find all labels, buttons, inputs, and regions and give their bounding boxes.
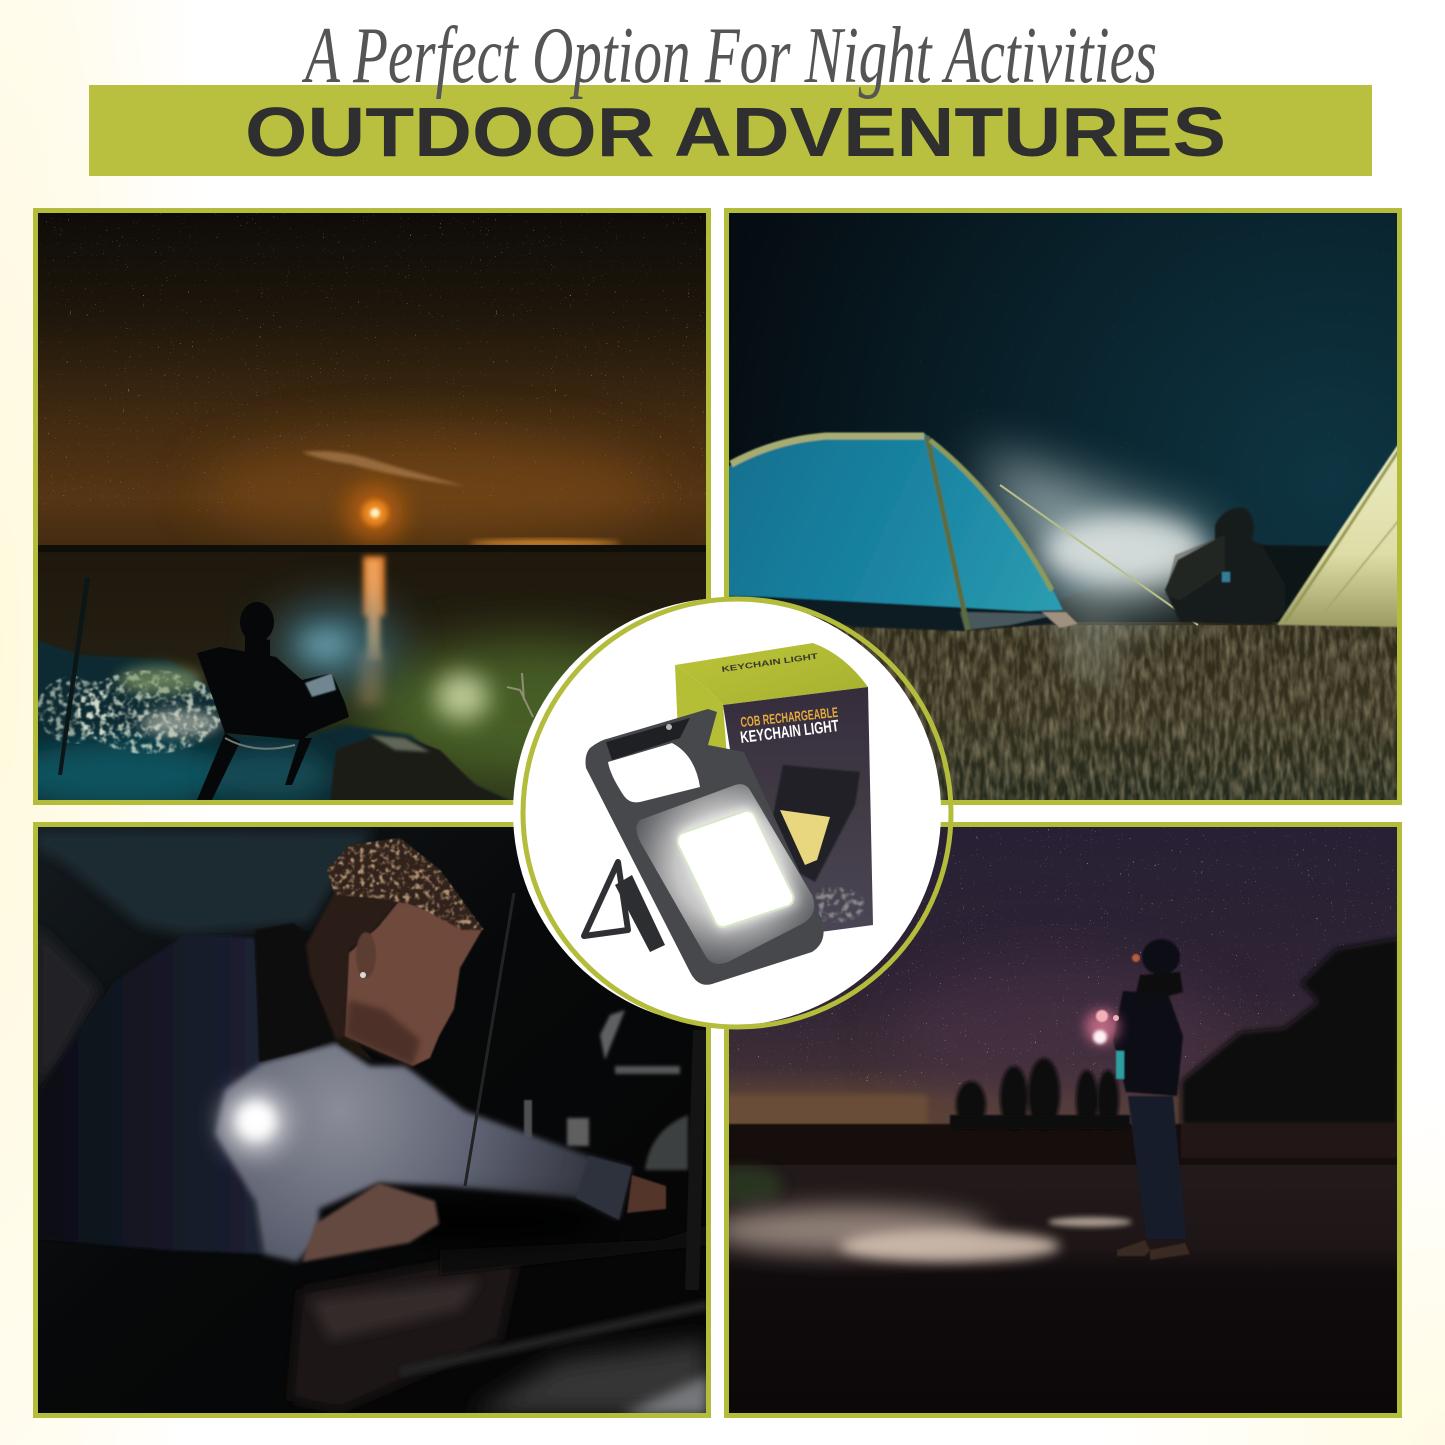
twigs xyxy=(507,673,533,717)
hand xyxy=(302,1183,439,1262)
box flap label: KEYCHAIN LIGHT xyxy=(721,652,818,674)
dark back of jacket xyxy=(36,934,263,1254)
cuff xyxy=(576,1156,632,1220)
ear xyxy=(356,932,376,978)
person standing xyxy=(1113,939,1190,1260)
center product circle xyxy=(513,598,951,1027)
light glow xyxy=(677,807,797,930)
box label white: KEYCHAIN LIGHT xyxy=(739,717,840,747)
road xyxy=(727,1165,1399,1415)
rocks foreground xyxy=(38,640,510,800)
sky xyxy=(727,211,1399,631)
collar xyxy=(255,923,336,1062)
white disc xyxy=(513,598,941,1026)
distant hills xyxy=(1060,544,1330,622)
moon xyxy=(347,485,403,541)
head lamp xyxy=(1132,954,1140,962)
person sitting xyxy=(1165,508,1285,625)
tree line and field xyxy=(727,938,1399,1169)
pink torch glow xyxy=(1085,1010,1119,1044)
script subtitle: A Perfect Option For Night Activities xyxy=(302,10,1157,100)
sky glow xyxy=(890,960,1230,1120)
horizon glow xyxy=(200,435,660,546)
main title: OUTDOOR ADVENTURES xyxy=(245,93,1226,171)
keychain art on box xyxy=(772,765,860,882)
far hand xyxy=(627,1175,666,1213)
rivet xyxy=(666,724,672,730)
sky xyxy=(36,211,708,549)
heading: banner and title text xyxy=(89,10,1372,176)
panel borders xyxy=(36,210,1400,1416)
seated person silhouette xyxy=(197,602,349,800)
starry print on box xyxy=(805,887,865,923)
pale yellow tent xyxy=(1277,443,1399,627)
chest lamp glow xyxy=(221,1088,289,1156)
thin cloud xyxy=(302,451,465,486)
curly hair xyxy=(327,838,484,930)
guy rope xyxy=(1000,485,1198,625)
water glow from torch xyxy=(275,609,700,780)
box label orange: COB RECHARGEABLE xyxy=(740,704,839,730)
title banner xyxy=(89,85,1372,176)
battery block xyxy=(615,875,665,952)
carabiner bar xyxy=(606,718,690,760)
stars xyxy=(727,825,1399,1085)
box side xyxy=(675,665,728,780)
car window xyxy=(36,830,375,935)
box top flap xyxy=(675,643,868,705)
beam of light on road xyxy=(710,1206,1132,1262)
night sky xyxy=(727,825,1399,1125)
panel: tent at night xyxy=(727,211,1399,802)
neck xyxy=(338,1036,373,1060)
keychain light xyxy=(584,709,824,985)
light on box artwork xyxy=(780,810,830,865)
dark garage background xyxy=(36,825,708,1415)
stars xyxy=(727,211,1399,471)
panel: person on road under starry sky xyxy=(707,825,1399,1415)
stars xyxy=(36,211,708,511)
gray bezel xyxy=(636,784,814,964)
grass field xyxy=(826,622,1397,800)
face xyxy=(345,900,482,1066)
car door side xyxy=(38,932,98,1082)
body xyxy=(586,709,824,985)
blue dome tent xyxy=(727,433,1078,631)
jacket shadow xyxy=(472,1186,558,1196)
hanger hole xyxy=(608,743,700,802)
lit front of jacket xyxy=(215,1043,632,1262)
panel: lakeside night with moon xyxy=(5,211,708,807)
stand xyxy=(584,862,628,936)
moon reflection xyxy=(359,556,385,705)
fence stick xyxy=(58,578,90,775)
hood cable xyxy=(465,893,514,1186)
face shadow xyxy=(345,1000,420,1066)
shaved side of head xyxy=(306,890,400,1040)
LED panel xyxy=(678,811,793,927)
light beam xyxy=(975,450,1215,687)
grass texture xyxy=(836,625,1397,800)
product box xyxy=(675,643,873,940)
engine bay xyxy=(290,1010,708,1415)
lake water xyxy=(36,550,708,802)
grass patch xyxy=(707,1167,783,1203)
panel: mechanic working under car hood xyxy=(36,825,708,1415)
green ring xyxy=(523,599,951,1027)
box front xyxy=(723,687,873,940)
dry reeds xyxy=(727,1095,927,1130)
horizon shoreline xyxy=(36,545,708,552)
